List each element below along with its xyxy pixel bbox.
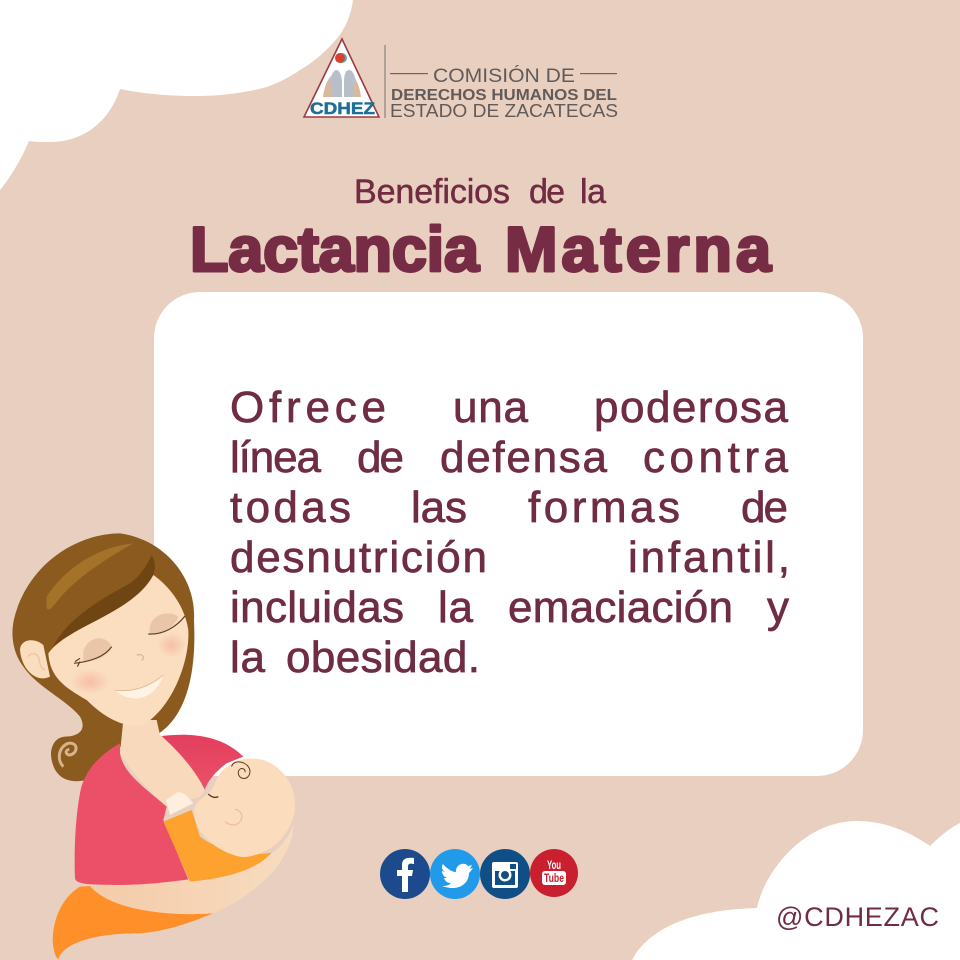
message text: la	[230, 633, 266, 682]
message text: línea	[230, 433, 322, 482]
illustration: mother breastfeeding baby	[12, 533, 295, 959]
logo: CDHEZ	[304, 39, 618, 121]
baby ear	[225, 809, 242, 825]
ear	[20, 640, 50, 678]
message text: y	[767, 583, 789, 632]
message text: contra	[643, 433, 789, 482]
social handle: @CDHEZAC	[776, 902, 939, 932]
message text: desnutrición	[230, 533, 487, 582]
baby body	[163, 810, 272, 882]
logo name	[390, 65, 618, 121]
social media icons	[380, 849, 578, 899]
icon: facebook	[380, 849, 430, 899]
baby hand	[166, 792, 193, 815]
message text: todas	[230, 483, 351, 532]
heading: Beneficios de la: de	[529, 173, 565, 211]
logo name: COMISIÓN DE	[433, 65, 575, 87]
message text: obesidad.	[286, 633, 480, 682]
mother arm	[90, 825, 293, 914]
nose	[137, 655, 143, 661]
message text: de	[357, 433, 404, 482]
icon: instagram	[480, 849, 530, 899]
icon: twitter	[430, 849, 480, 899]
message text: infantil,	[628, 533, 790, 582]
neck and chest	[120, 720, 205, 807]
message text: Ofrece	[230, 383, 386, 432]
heading: Lactancia Materna: Materna	[505, 215, 772, 285]
message text: formas	[528, 483, 680, 532]
message text	[230, 383, 790, 682]
face	[48, 575, 188, 726]
cheeks	[71, 669, 109, 694]
message text: una	[453, 383, 529, 432]
message text: de	[741, 483, 788, 532]
eyes	[83, 613, 178, 662]
heading: Lactancia Materna	[190, 215, 772, 285]
heading: Beneficios de la: la	[580, 173, 606, 211]
hair highlights	[46, 543, 133, 610]
icon: youtube: Tube	[544, 871, 564, 885]
baby head	[194, 759, 295, 857]
message text: poderosa	[594, 383, 789, 432]
logo name: DERECHOS HUMANOS DEL	[391, 87, 617, 104]
cloud: bottom right	[632, 821, 960, 960]
baby curl	[232, 762, 250, 779]
logo triangle	[304, 39, 379, 118]
message text: defensa	[440, 433, 608, 482]
shirt	[75, 735, 243, 885]
logo triangle: CDHEZ	[310, 99, 375, 118]
smile	[115, 675, 163, 698]
panel: message card	[154, 292, 863, 776]
scarf	[53, 886, 213, 959]
message text: incluidas	[230, 583, 404, 632]
icon: youtube	[530, 849, 578, 897]
message text: las	[411, 483, 467, 532]
cloud: top left	[0, 0, 353, 190]
heading: Beneficios de la	[354, 173, 606, 211]
logo name: ESTADO DE ZACATECAS	[390, 101, 618, 121]
message text: la	[438, 583, 474, 632]
hair	[12, 533, 194, 781]
message text: emaciación	[508, 583, 733, 632]
heading: Lactancia Materna: Lactancia	[190, 215, 480, 285]
icon: youtube: You	[547, 858, 561, 872]
heading: Beneficios de la: Beneficios	[354, 173, 510, 211]
